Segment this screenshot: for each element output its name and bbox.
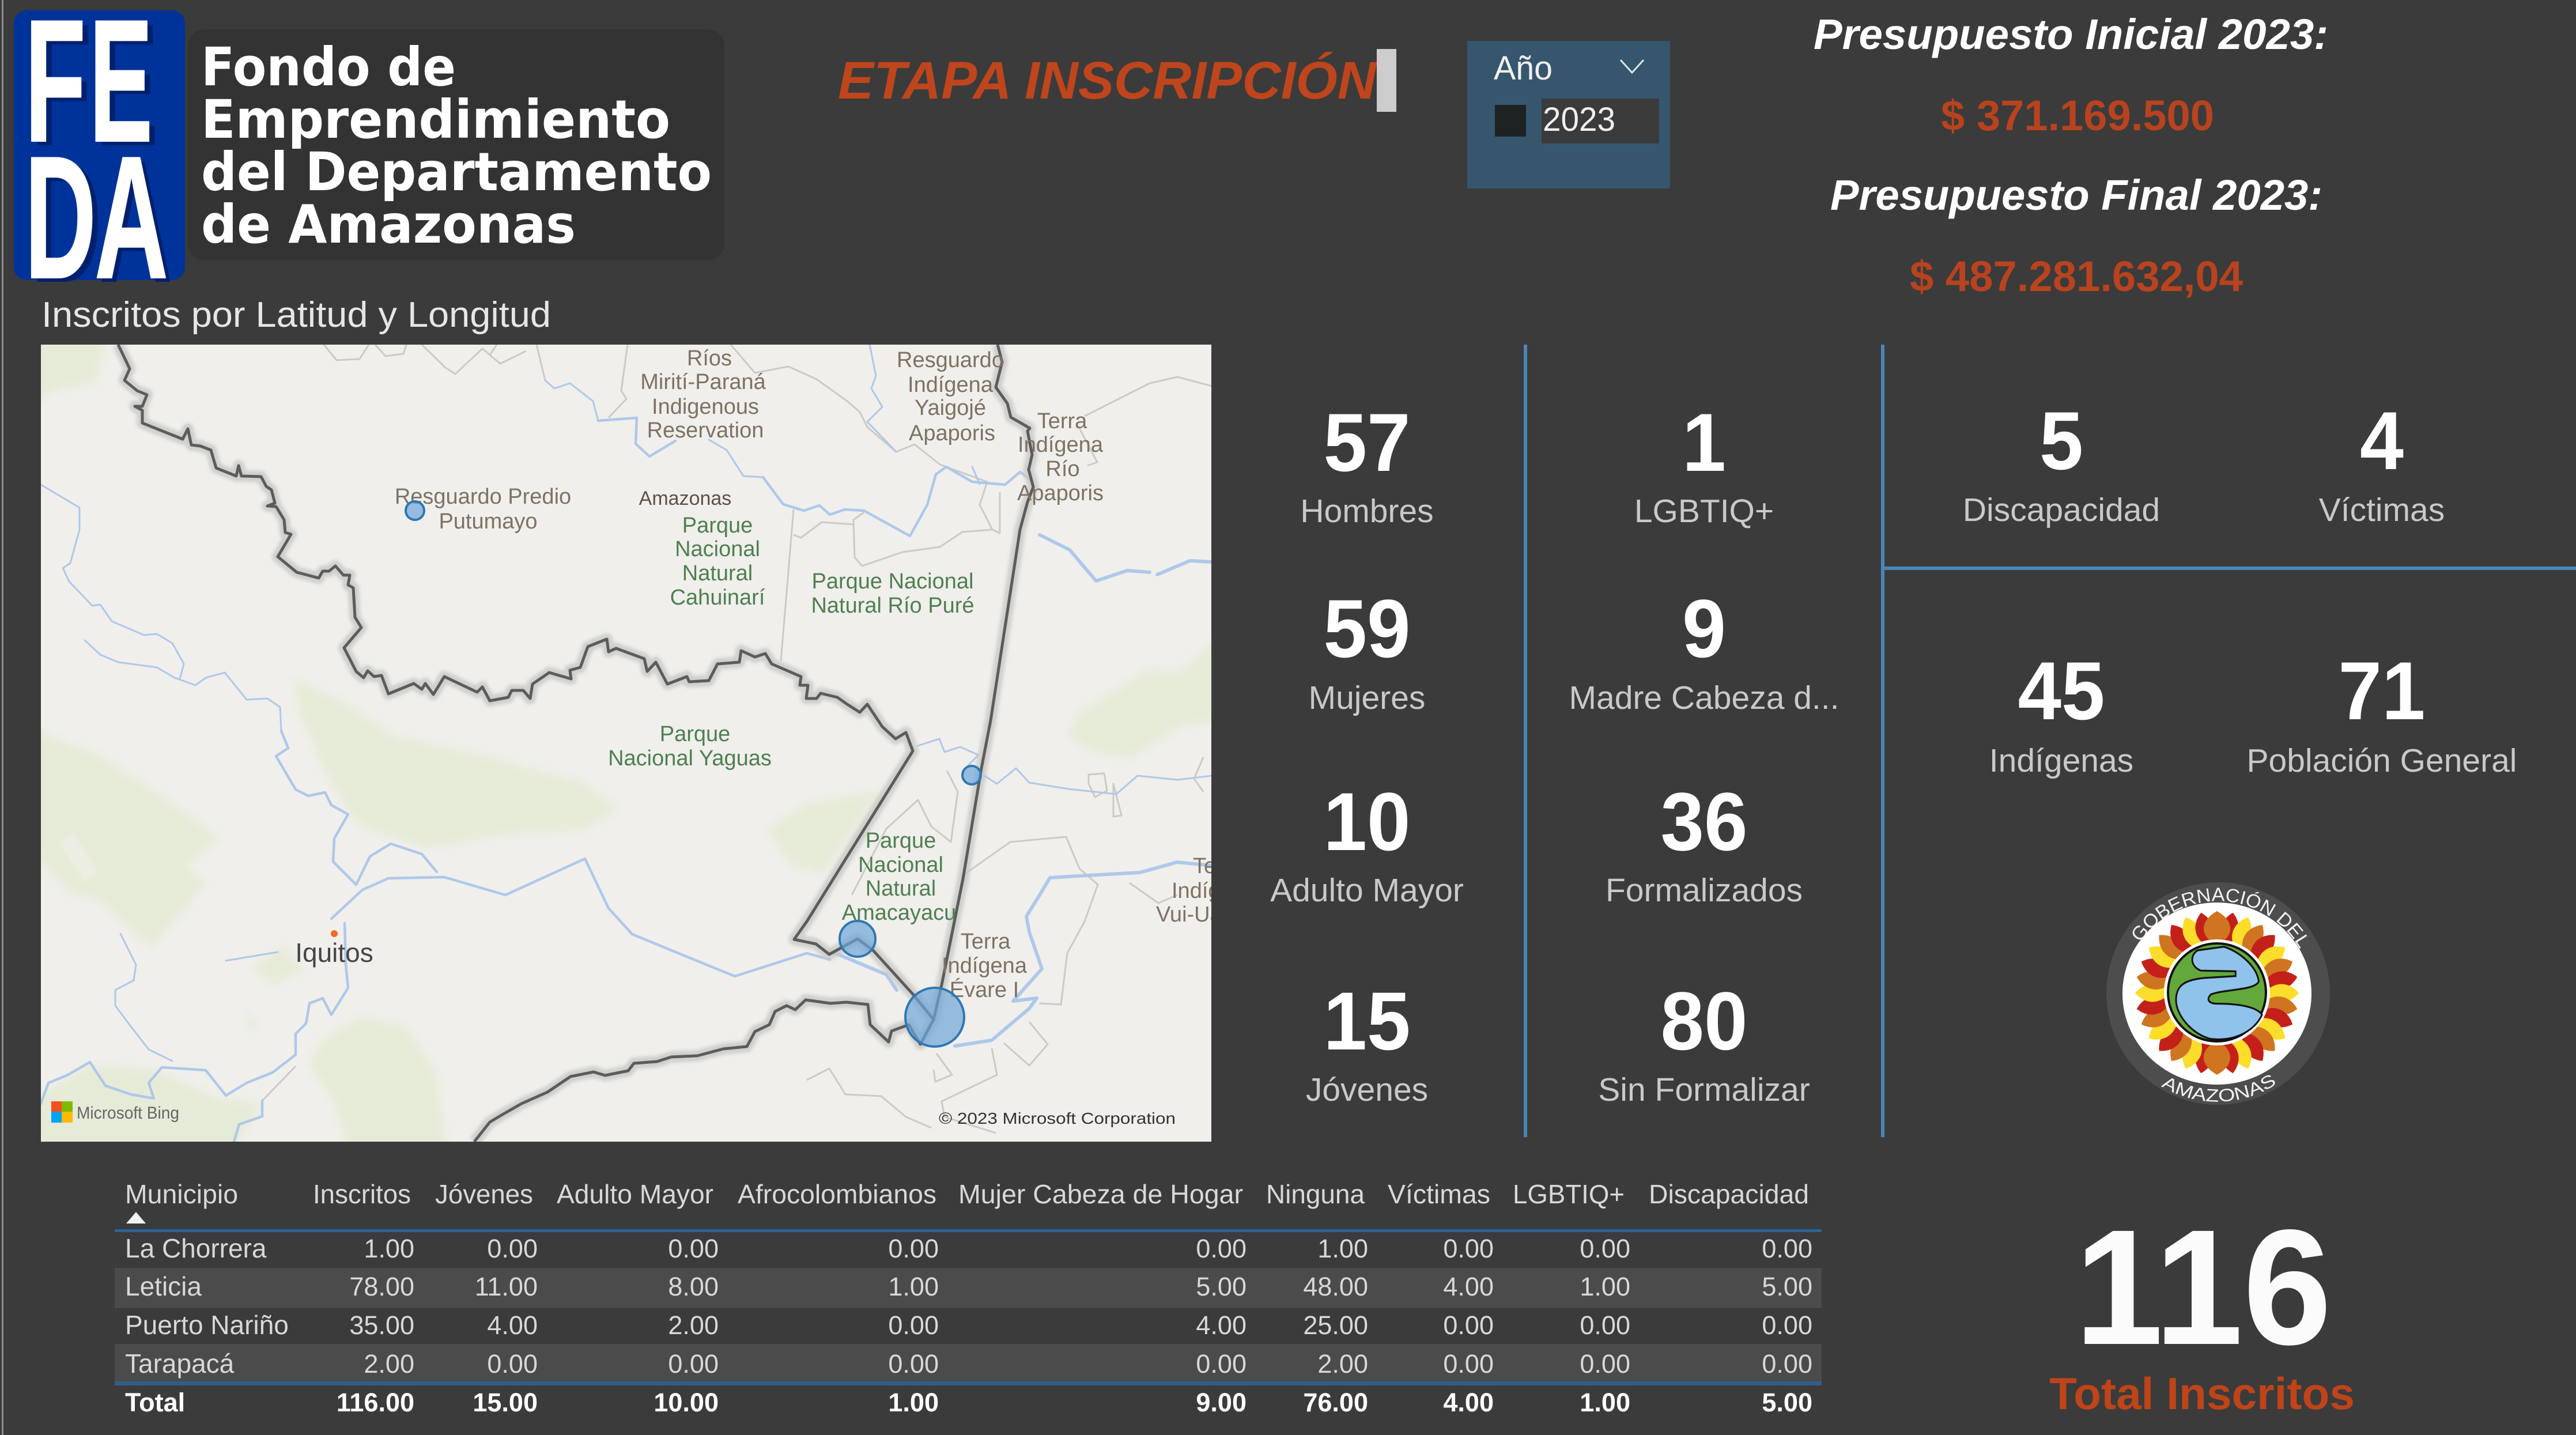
FEDA logo: D (31, 124, 102, 319)
KPI: Madre Cabeza de Hogar (1569, 583, 1839, 716)
map: place labels: Nacional (858, 853, 943, 877)
table: header: Inscritos (313, 1179, 411, 1209)
map heading: Inscritos por Latitud y Longitud (41, 295, 551, 335)
map: bing logo: Microsoft Bing (77, 1104, 179, 1123)
map: copyright: © 2023 Microsoft Corporation (939, 1109, 1176, 1127)
table: Puerto Nariño: 35.00 (349, 1311, 414, 1340)
map: place labels: Amacayacu (842, 901, 956, 925)
table: Total: 116.00 (337, 1388, 414, 1417)
total inscritos: 116 (2075, 1196, 2332, 1379)
table: header: Víctimas (1388, 1179, 1490, 1209)
KPI: Adulto Mayor (1270, 776, 1464, 909)
table: Tarapacá: 0.00 (1580, 1349, 1630, 1379)
icon: Gobernación del Amazonas seal (2106, 882, 2330, 1105)
map: place labels: Nacional (675, 537, 760, 561)
table: header: Afrocolombianos (738, 1179, 936, 1209)
seal: ring text (2126, 884, 2314, 1106)
KPI: Sin Formalizar: 80 (1661, 976, 1747, 1067)
table: La Chorrera: 1.00 (1317, 1234, 1368, 1263)
map: national borders (118, 345, 1033, 1142)
table: Puerto Nariño: 2.00 (668, 1311, 719, 1340)
table: Leticia: 78.00 (349, 1272, 414, 1301)
budget: presupuesto inicial: Presupuesto Inicial 2023: (1814, 10, 2328, 58)
map: place labels: Parque (682, 513, 753, 538)
KPI: Indígenas: 45 (2018, 645, 2105, 737)
KPI dividers (1524, 345, 2576, 1137)
map: place labels: Natural Río Puré (811, 594, 975, 618)
map: place labels: Vui-Uata (1156, 902, 1241, 927)
map: place labels: Yaigojé (915, 396, 986, 420)
map: place labels: Parque (866, 829, 936, 853)
logo wordmark: Fondo de (201, 36, 456, 98)
logo wordmark: de Amazonas (201, 194, 576, 255)
seal: globe with river (2164, 939, 2270, 1045)
table: La Chorrera: 0.00 (1580, 1234, 1630, 1263)
FEDA logo: A (99, 124, 173, 319)
table: Leticia: 1.00 (1580, 1272, 1630, 1301)
table: Total: 76.00 (1303, 1388, 1368, 1417)
table: Puerto Nariño: 4.00 (487, 1311, 538, 1340)
KPI: Formalizados (1606, 776, 1803, 909)
map panel (23, 334, 1257, 1153)
table: La Chorrera: 0.00 (487, 1234, 538, 1263)
KPI: Mujeres (1309, 583, 1425, 716)
FEDA logo: A (95, 120, 168, 315)
table: La Chorrera: 0.00 (888, 1234, 939, 1263)
map: rivers (41, 345, 1212, 1142)
map: place labels: Putumayo (439, 509, 538, 534)
table: Leticia: 5.00 (1762, 1272, 1812, 1301)
KPI: Víctimas (2319, 395, 2445, 528)
KPI: LGBTIQ+: 1 (1682, 397, 1726, 489)
map: place labels: Río (1045, 457, 1080, 481)
table: header: Municipio (125, 1179, 238, 1209)
table: municipios (115, 1179, 1822, 1417)
table: La Chorrera: 0.00 (1762, 1234, 1812, 1263)
table: Total (125, 1388, 1812, 1417)
KPI: LGBTIQ+: LGBTIQ+ (1634, 493, 1774, 530)
table: Total: 1.00 (888, 1388, 939, 1417)
table: Total: 10.00 (654, 1388, 719, 1417)
table: Leticia: 11.00 (475, 1272, 538, 1301)
map: place labels: Apaporis (909, 421, 995, 445)
table: Tarapacá: 0.00 (888, 1349, 939, 1379)
map: place labels: Indigenous (652, 395, 759, 419)
table: row bands and rules (115, 1229, 1822, 1385)
table: Total: 4.00 (1443, 1388, 1494, 1417)
table: La Chorrera: 1.00 (364, 1234, 414, 1263)
KPI: Población General (2247, 645, 2517, 779)
table: Puerto Nariño: 0.00 (888, 1311, 939, 1340)
table: Leticia: 48.00 (1303, 1272, 1368, 1301)
table: Leticia: Leticia (125, 1271, 202, 1301)
table: header: Adulto Mayor (557, 1179, 713, 1209)
map: place labels: Natural (682, 561, 753, 586)
KPI: Población General: Población General (2247, 742, 2517, 779)
budget: presupuesto inicial (1814, 10, 2328, 139)
KPI: Mujeres: 59 (1323, 583, 1411, 675)
KPI: Jóvenes: 15 (1323, 976, 1411, 1067)
map: place labels: Terra (1193, 854, 1243, 878)
logo wordmark: del Departamento (201, 141, 712, 203)
map: place labels: Indígena (942, 954, 1028, 978)
map: administrative lines (262, 345, 1212, 1133)
table: Total: 5.00 (1762, 1388, 1812, 1417)
table: La Chorrera: 0.00 (1196, 1234, 1247, 1263)
map: place labels (295, 346, 1257, 1002)
map: place labels: Natural (866, 877, 936, 901)
budget: presupuesto final: $ 487.281.632,04 (1910, 252, 2243, 300)
logo wordmark (201, 36, 712, 255)
table: Puerto Nariño: 0.00 (1443, 1311, 1494, 1340)
table: Leticia: 5.00 (1196, 1272, 1247, 1301)
table: Puerto Nariño: 0.00 (1762, 1311, 1812, 1340)
year slicer: 2023 (1543, 101, 1615, 138)
map: place labels: Apaporis (1017, 481, 1104, 505)
table: Tarapacá: Tarapacá (125, 1349, 235, 1379)
map: place labels: Reservation (647, 418, 764, 443)
table: header: Ninguna (1266, 1179, 1365, 1209)
table: header: Mujer Cabeza de Hogar (958, 1179, 1243, 1209)
map: place labels: Évare I (950, 977, 1019, 1002)
table: Tarapacá: 2.00 (364, 1349, 414, 1379)
table: header: Discapacidad (1649, 1179, 1809, 1209)
seal: sun petals (2135, 911, 2299, 1075)
table: Puerto Nariño: 4.00 (1196, 1311, 1247, 1340)
map: place labels: Resguardo (897, 348, 1004, 372)
table: Puerto Nariño: Puerto Nariño (125, 1310, 289, 1340)
table: Tarapacá: 0.00 (668, 1349, 719, 1379)
KPI: Discapacidad (1963, 395, 2160, 528)
KPI: LGBTIQ+ (1634, 397, 1774, 530)
map: place labels: Nacional Yaguas (608, 746, 772, 771)
map: green areas (23, 334, 1222, 1153)
table: Tarapacá (125, 1349, 1812, 1379)
KPI: Jóvenes (1306, 976, 1428, 1108)
map: bing logo (51, 1101, 179, 1123)
table: header: LGBTIQ+ (1513, 1179, 1625, 1209)
KPI: Población General: 71 (2339, 645, 2425, 737)
KPI: Víctimas: Víctimas (2319, 492, 2445, 528)
KPI: Formalizados: Formalizados (1606, 872, 1803, 909)
KPI: Hombres (1300, 397, 1434, 530)
KPI: Adulto Mayor: Adulto Mayor (1270, 872, 1464, 909)
KPI: Sin Formalizar: Sin Formalizar (1598, 1071, 1810, 1108)
table: Total: 9.00 (1196, 1388, 1247, 1417)
KPI: Discapacidad: 5 (2039, 395, 2083, 487)
budget: presupuesto final: Presupuesto Final 2023: (1830, 171, 2322, 219)
logo wordmark: Emprendimiento (201, 89, 670, 150)
year slicer: Año (1494, 50, 1553, 87)
FEDA logo: D (25, 120, 96, 315)
map: place labels: Mirití-Paraná (640, 370, 766, 394)
table: Leticia: 8.00 (668, 1272, 719, 1301)
table: La Chorrera: 0.00 (668, 1234, 719, 1263)
total inscritos: Total Inscritos (2049, 1368, 2355, 1419)
table: Total: Total (125, 1388, 185, 1417)
map: place labels: Terra (961, 930, 1011, 954)
table: Tarapacá: 0.00 (1762, 1349, 1812, 1379)
table: header (125, 1179, 1809, 1223)
FEDA logo (14, 0, 724, 319)
KPI: Mujeres: Mujeres (1309, 679, 1425, 716)
map: place labels: Indígena (1018, 433, 1104, 457)
KPI: Hombres: 57 (1323, 397, 1411, 489)
table: Total: 15.00 (473, 1388, 538, 1417)
KPI: Discapacidad: Discapacidad (1963, 492, 2160, 528)
table: Tarapacá: 0.00 (1443, 1349, 1494, 1379)
table: Puerto Nariño: 0.00 (1580, 1311, 1630, 1340)
KPI: Adulto Mayor: 10 (1323, 776, 1411, 868)
map: place labels: Indígena (908, 373, 994, 397)
map: clearing in forest (61, 836, 96, 880)
table: Leticia (125, 1271, 1812, 1301)
map: data bubbles (406, 501, 981, 1047)
KPI: Sin Formalizar (1598, 976, 1810, 1108)
table: La Chorrera: La Chorrera (125, 1233, 267, 1263)
KPI: Jóvenes: Jóvenes (1306, 1071, 1428, 1108)
map: place labels: Ríos (687, 346, 732, 371)
budget: presupuesto final (1830, 171, 2322, 300)
KPI: Madre Cabeza de Hogar: 9 (1682, 583, 1726, 675)
seal: ring text: GOBERNACIÓN DEL (2132, 888, 2307, 949)
table: header: Jóvenes (435, 1179, 533, 1209)
table: La Chorrera: 0.00 (1443, 1234, 1494, 1263)
map: place labels: Indígena (1172, 879, 1257, 903)
table: Tarapacá: 2.00 (1317, 1349, 1368, 1379)
title: etapa inscripción: ETAPA INSCRIPCIÓN (838, 51, 1378, 110)
year slicer (1467, 41, 1670, 188)
table: Puerto Nariño: 25.00 (1303, 1311, 1368, 1340)
map: place labels: Terra (1037, 409, 1087, 433)
table: Tarapacá: 0.00 (1196, 1349, 1247, 1379)
KPI: Hombres: Hombres (1300, 493, 1434, 530)
seal: ring text: AMAZONAS (2161, 1075, 2275, 1102)
KPI: Indígenas: Indígenas (1989, 742, 2133, 779)
KPI: Formalizados: 36 (1661, 776, 1747, 868)
map: place labels: Cahuinarí (670, 586, 765, 610)
table: Tarapacá: 0.00 (487, 1349, 538, 1379)
map: place labels: Parque Nacional (812, 569, 973, 594)
map: place labels: Resguardo Predio (395, 485, 571, 509)
map: place labels: Amazonas (639, 488, 731, 509)
table: Puerto Nariño (125, 1310, 1812, 1340)
table: La Chorrera (125, 1233, 1812, 1263)
table: Leticia: 4.00 (1443, 1272, 1494, 1301)
KPI: Madre Cabeza de Hogar: Madre Cabeza d... (1569, 679, 1839, 716)
map: place labels: Iquitos (295, 938, 373, 968)
table: Leticia: 1.00 (888, 1272, 939, 1301)
map: place labels: Parque (660, 722, 730, 746)
table: Total: 1.00 (1580, 1388, 1630, 1417)
budget: presupuesto inicial: $ 371.169.500 (1941, 92, 2214, 139)
KPI: Indígenas (1989, 645, 2133, 779)
KPI: Víctimas: 4 (2360, 395, 2404, 487)
